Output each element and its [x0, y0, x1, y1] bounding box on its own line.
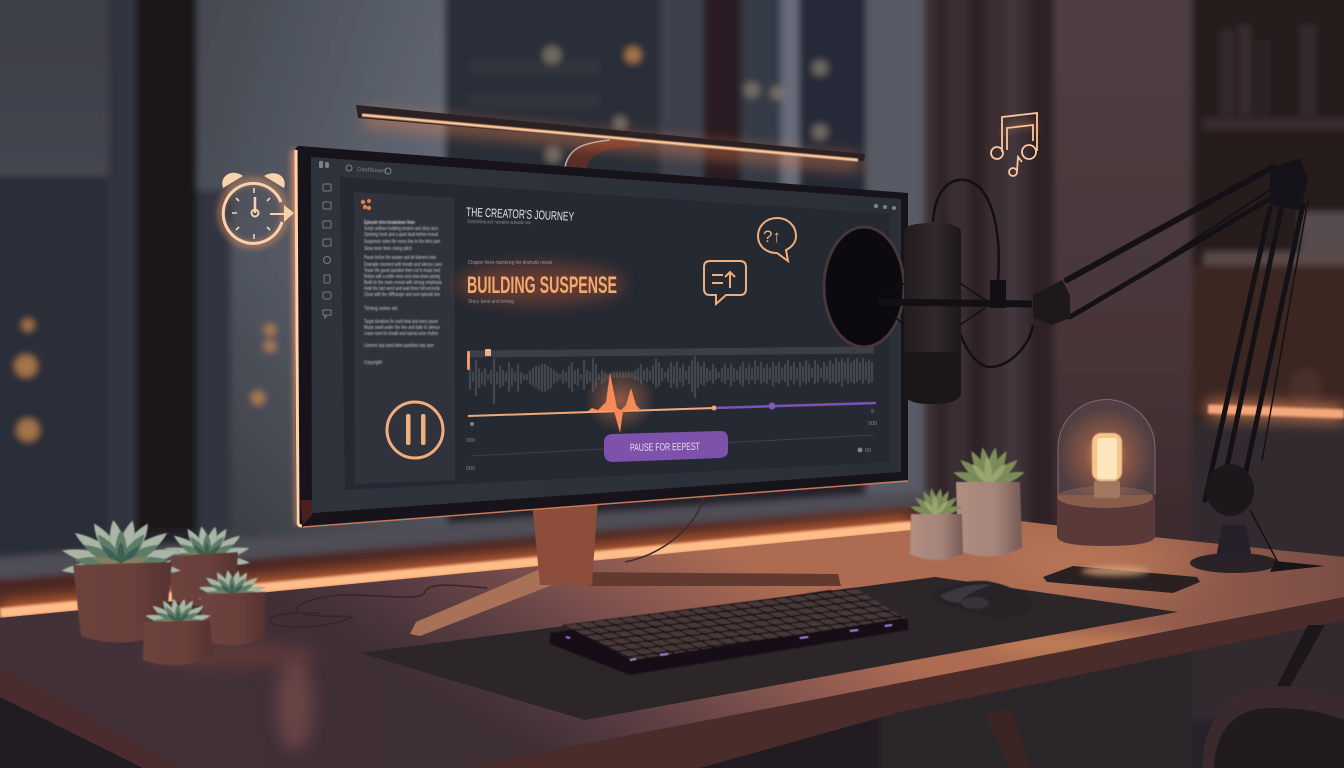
stand base — [1190, 553, 1278, 573]
clock rim — [223, 183, 282, 243]
chat bubble: question — [758, 218, 796, 261]
building: behind screen — [197, 190, 231, 530]
suspense spike — [588, 373, 640, 433]
bar body — [356, 105, 865, 161]
caption: Story beat and timing — [468, 299, 514, 305]
lower right wall — [1192, 420, 1344, 720]
suspense peak glow — [584, 368, 656, 432]
upper arm — [1067, 167, 1273, 280]
script text: Slow tone then rising pitch — [364, 246, 412, 252]
keyboard — [550, 588, 908, 675]
timeline labels: 9 — [871, 409, 874, 415]
script text: Script outlines building tension and story arcs — [364, 226, 438, 232]
bar glow — [364, 118, 860, 164]
audio waveform — [470, 356, 872, 404]
lamp base — [1057, 497, 1155, 546]
monitor cable — [625, 495, 705, 562]
script text: Pause before the answer and let listeners lean — [364, 255, 436, 261]
shelf LED — [1208, 409, 1344, 414]
timeline labels: 00 — [865, 448, 871, 454]
back pot — [170, 552, 238, 606]
script text: Return with a softer voice and slow down pacing — [364, 274, 440, 280]
lamp bulb — [1092, 433, 1122, 481]
monitor glow edge — [296, 150, 300, 524]
script text: Episode intro breakdown lines — [364, 220, 415, 226]
plants: right group — [909, 447, 1026, 560]
bar support — [564, 138, 640, 170]
script text: Target durations for each beat and every pause — [364, 319, 438, 325]
big pot — [73, 562, 172, 643]
progress line: remaining — [714, 403, 876, 408]
script text: Tease the guest question then cut to music bed — [364, 268, 440, 274]
left sky pane — [0, 0, 110, 580]
front plant — [144, 599, 212, 630]
stand right leg — [570, 572, 841, 586]
clock arrow — [270, 205, 294, 222]
script text: Listeners stay tuned when questions stay open — [364, 343, 434, 349]
stand cone — [1216, 525, 1252, 558]
desk left underside — [0, 667, 183, 768]
clock ticks — [232, 188, 270, 239]
bookshelf — [1192, 0, 1344, 440]
curtain — [924, 0, 1054, 540]
chat bubble: question: ?↑ — [763, 227, 781, 246]
bar light — [362, 115, 858, 160]
lower wall and floor — [860, 640, 1192, 768]
building: left tower — [0, 176, 110, 576]
plant — [952, 447, 1026, 488]
desk reflection — [277, 659, 313, 751]
lamp dome — [1058, 399, 1155, 495]
lamp socket — [1094, 480, 1120, 498]
city lights — [15, 46, 828, 441]
icon: music notes — [991, 113, 1037, 176]
timeline labels: 000 — [466, 438, 475, 444]
building: right tower — [799, 0, 866, 200]
clock glow — [221, 181, 285, 245]
progress line: played — [468, 408, 714, 416]
stand front leg — [410, 570, 560, 636]
script text: Opening hook and a quiet beat before reveal — [364, 232, 438, 238]
script text: Copyright — [364, 360, 382, 366]
lamp glow — [1058, 407, 1154, 503]
shock mount — [878, 302, 1032, 304]
script text: Build to the main reveal with strong emphasis — [364, 280, 442, 286]
microphone — [824, 180, 1033, 404]
script text — [364, 220, 442, 366]
timeline labels — [466, 409, 877, 472]
icon: alarm clock — [221, 173, 294, 245]
pillar — [866, 0, 924, 520]
desk front face — [460, 597, 1344, 768]
stand neck — [532, 498, 598, 585]
phone — [1043, 566, 1200, 593]
desk legs — [985, 708, 1032, 768]
keyboard body — [550, 590, 908, 675]
timeline labels: 000 — [466, 466, 475, 472]
script text: Suspense notes for every line in the intro part — [364, 239, 440, 245]
top bar: Dashboard — [357, 167, 387, 175]
button: pause for effect: PAUSE FOR EEPEST — [630, 441, 700, 454]
lower track line — [470, 435, 874, 456]
centre sky pane — [197, 0, 447, 540]
desk surface — [0, 510, 1344, 768]
mic body — [904, 223, 961, 404]
big plant — [60, 519, 182, 577]
subtitle: Storytelling and narrative episode one — [467, 219, 531, 226]
pot — [910, 514, 963, 560]
front pot — [143, 620, 213, 665]
right plant — [198, 570, 266, 602]
keyboard lights — [566, 625, 892, 660]
window sill — [0, 490, 930, 582]
right pot — [200, 592, 265, 646]
script text: Leave room for breath and natural voice rhythm — [364, 331, 438, 337]
screen inner panel — [340, 177, 890, 490]
clock hands — [254, 197, 256, 213]
timeline labels: 000 — [868, 421, 877, 427]
stand cable — [1250, 510, 1282, 570]
script text: Music swell under the line and fade to silence — [364, 325, 440, 331]
kicker: Chapter three mastering the dramatic reveal — [468, 260, 552, 266]
keys — [562, 588, 905, 660]
heading glow — [455, 264, 625, 304]
mouse — [932, 581, 1033, 617]
back plant — [163, 526, 251, 567]
sidebar icons — [323, 184, 331, 318]
wall — [1054, 0, 1194, 550]
mic cable — [933, 180, 999, 282]
pop filter — [824, 227, 904, 347]
apex joint — [1270, 158, 1308, 210]
pause button icon — [387, 402, 443, 458]
mic mesh — [904, 352, 961, 404]
heading: building suspense: BUILDING SUSPENSE — [467, 272, 617, 299]
title: THE CREATOR'S JOURNEY — [466, 205, 575, 224]
table lamp — [1057, 399, 1155, 546]
light bar — [356, 105, 865, 170]
lower joint — [1206, 464, 1254, 516]
plant on shelf — [1290, 368, 1322, 404]
monitor screen — [311, 157, 901, 513]
script text: Dramatic moment with breath and silence cues — [364, 262, 442, 268]
timeline strip — [467, 349, 874, 370]
building: centre tower — [445, 0, 660, 200]
LED strip under window — [0, 526, 912, 614]
chair — [1202, 686, 1344, 768]
bezel — [295, 146, 908, 527]
left script panel — [354, 192, 455, 484]
plant — [909, 488, 963, 518]
clock bells — [222, 173, 285, 188]
script text: Close with the cliffhanger and next episode line — [364, 292, 440, 298]
window frames — [108, 0, 136, 540]
maroon frame — [703, 0, 741, 200]
plants: left group — [60, 519, 266, 665]
desk cable — [270, 585, 487, 627]
playhead markers — [712, 402, 776, 410]
joint plate — [1033, 280, 1070, 325]
chat bubble: text arrow — [704, 261, 746, 304]
script text: Timing notes etc — [364, 306, 398, 312]
pot — [956, 482, 1022, 557]
monitor stand — [410, 498, 841, 636]
button: pause for effect — [604, 431, 728, 462]
top bar — [319, 161, 896, 210]
panel logo — [361, 199, 371, 210]
boom arm — [1033, 158, 1325, 573]
script text: Hold the last word and wait three full seconds — [364, 286, 440, 292]
mouse pad — [360, 577, 1178, 720]
desk glow — [1005, 536, 1205, 584]
lower arm struts — [1205, 208, 1270, 500]
slate column — [660, 0, 703, 200]
